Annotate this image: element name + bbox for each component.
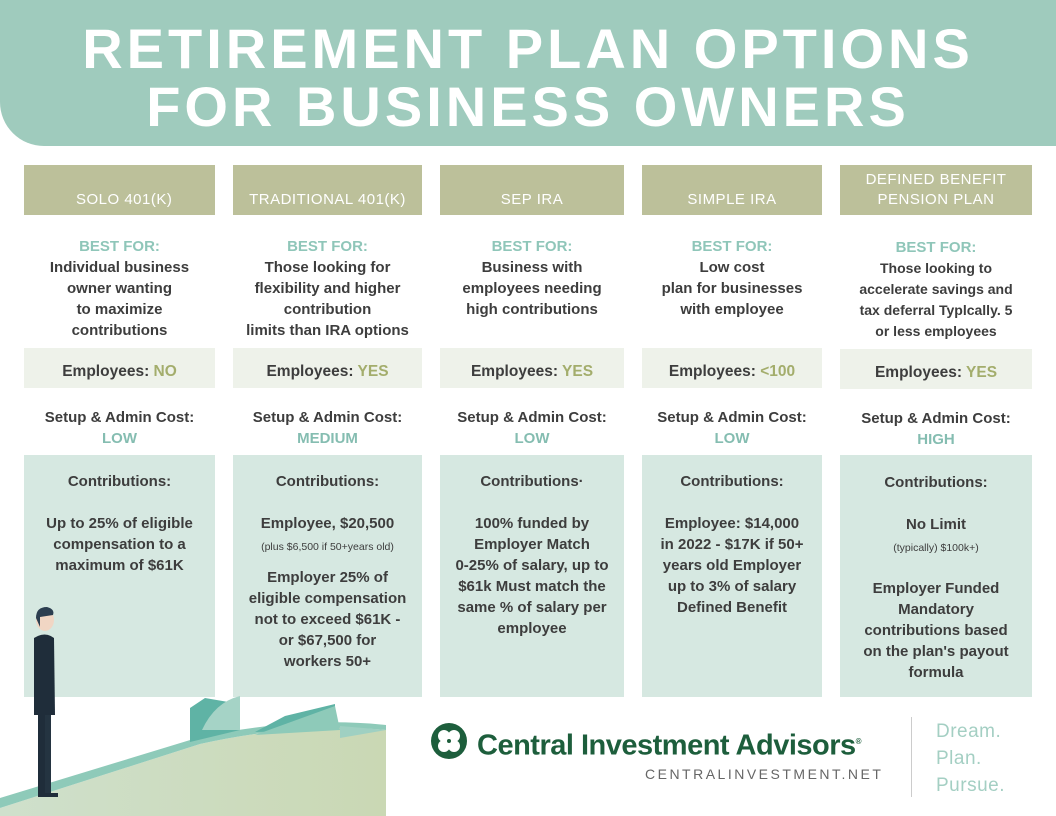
website: CENTRALINVESTMENT.NET bbox=[645, 766, 883, 782]
panel: SIMPLE IRA bbox=[642, 165, 822, 697]
panel: defined benefit: Employer Funded bbox=[873, 580, 999, 597]
best for text: Low cost bbox=[699, 259, 764, 276]
column heading bbox=[24, 165, 215, 215]
employees row: Employees: NO bbox=[62, 363, 177, 380]
setup cost bbox=[45, 409, 194, 447]
employees row bbox=[440, 348, 624, 388]
employees row bbox=[642, 348, 822, 388]
panel: traditional 401k: or $67,500 for bbox=[279, 632, 376, 649]
column heading: SIMPLE IRA bbox=[687, 191, 777, 208]
setup cost: LOW bbox=[514, 430, 550, 447]
contributions text: Contributions: bbox=[68, 473, 171, 490]
panel: solo 401k: compensation to a bbox=[53, 536, 186, 553]
employees row: Employees: YES bbox=[471, 363, 593, 380]
best for text: BEST FOR: bbox=[692, 238, 772, 255]
panel: solo 401k bbox=[24, 165, 215, 697]
header band bbox=[0, 0, 1056, 146]
panel: SIMPLE IRA: Defined Benefit bbox=[677, 599, 787, 616]
best for text: owner wanting bbox=[67, 280, 172, 297]
panel: defined benefit: contributions based bbox=[864, 622, 1008, 639]
title: RETIREMENT PLAN OPTIONS bbox=[82, 17, 974, 80]
panel: traditional 401k: workers 50+ bbox=[284, 653, 371, 670]
employees row: Employees: <100 bbox=[669, 363, 795, 380]
best for text: Business with bbox=[482, 259, 582, 276]
column heading: SEP IRA bbox=[501, 191, 563, 208]
setup cost: Setup & Admin Cost: bbox=[457, 409, 607, 426]
panel: traditional 401k: not to exceed $61K - bbox=[255, 611, 400, 628]
best for text: Those looking to bbox=[880, 260, 992, 276]
panel: defined benefit: on the plan's payout bbox=[863, 643, 1009, 660]
title: FOR BUSINESS OWNERS bbox=[146, 75, 910, 138]
logo: clover icon bbox=[431, 723, 467, 759]
employees row: Employees: YES bbox=[875, 364, 997, 381]
man bbox=[34, 607, 58, 797]
tagline bbox=[936, 721, 1005, 796]
tagline: Pursue. bbox=[936, 775, 1005, 796]
panel: SEP IRA: 100% funded by bbox=[475, 515, 589, 532]
setup cost: LOW bbox=[714, 430, 750, 447]
best for text: with employee bbox=[680, 301, 784, 318]
best for text: plan for businesses bbox=[662, 280, 802, 297]
best for text: BEST FOR: bbox=[79, 238, 160, 255]
panel: SIMPLE IRA: up to 3% of salary bbox=[668, 578, 796, 595]
panel: defined benefit: Mandatory bbox=[898, 601, 974, 618]
best for text: contribution bbox=[284, 301, 371, 318]
best for text: accelerate savings and bbox=[859, 281, 1013, 297]
best for text bbox=[859, 239, 1013, 339]
title bbox=[82, 17, 974, 138]
column heading bbox=[440, 165, 624, 215]
setup cost: Setup & Admin Cost: bbox=[657, 409, 807, 426]
panel: SEP IRA: same % of salary per bbox=[457, 599, 607, 616]
contributions text: Contributions· bbox=[480, 473, 584, 490]
panel: SIMPLE IRA: in 2022 - $17K if 50+ bbox=[660, 536, 804, 553]
contributions box bbox=[24, 455, 215, 697]
illustration: man on rising hill with arrows bbox=[0, 607, 386, 816]
best for text bbox=[50, 238, 189, 339]
column heading bbox=[233, 165, 422, 215]
panel: traditional 401k: Employer 25% of bbox=[267, 569, 388, 586]
column heading: DEFINED BENEFIT bbox=[866, 171, 1006, 188]
setup cost: LOW bbox=[102, 430, 137, 447]
setup cost: MEDIUM bbox=[297, 430, 358, 447]
panel: solo 401k: maximum of $61K bbox=[55, 557, 184, 574]
best for text: employees needing bbox=[462, 280, 602, 297]
contributions box bbox=[642, 455, 822, 697]
setup cost: HIGH bbox=[917, 431, 955, 448]
tagline: Plan. bbox=[936, 748, 982, 769]
panel: defined benefit: No Limit bbox=[906, 516, 966, 533]
panel: SEP IRA bbox=[440, 165, 624, 697]
best for text bbox=[662, 238, 802, 318]
employees row bbox=[840, 349, 1032, 389]
contributions box bbox=[440, 455, 624, 697]
best for text bbox=[462, 238, 602, 318]
best for text: tax deferral Typlcally. 5 bbox=[860, 302, 1012, 318]
logo text: Central Investment Advisors® bbox=[477, 730, 861, 762]
setup cost bbox=[657, 409, 807, 447]
best for text: BEST FOR: bbox=[492, 238, 572, 255]
setup cost: Setup & Admin Cost: bbox=[253, 409, 402, 426]
panel: traditional 401k: Employee, $20,500 bbox=[261, 515, 394, 532]
panel: traditional 401k bbox=[233, 165, 422, 697]
setup cost bbox=[253, 409, 402, 447]
best for text bbox=[246, 238, 409, 339]
contributions text: Contributions: bbox=[680, 473, 784, 490]
panel: SEP IRA: Employer Match bbox=[474, 536, 590, 553]
setup cost bbox=[457, 409, 607, 447]
best for text: high contributions bbox=[466, 301, 598, 318]
column heading: PENSION PLAN bbox=[878, 191, 994, 208]
employees row bbox=[233, 348, 422, 388]
contributions text: Contributions: bbox=[276, 473, 379, 490]
best for text: to maximize bbox=[77, 301, 162, 318]
panel: defined benefit: formula bbox=[908, 664, 964, 681]
panel: SIMPLE IRA: Employee: $14,000 bbox=[665, 515, 799, 532]
column heading: TRADITIONAL 401(K) bbox=[249, 191, 406, 208]
column heading bbox=[642, 165, 822, 215]
best for text: or less employees bbox=[875, 323, 997, 339]
best for text: flexibility and higher bbox=[255, 280, 400, 297]
panel: SEP IRA: employee bbox=[497, 620, 567, 637]
tagline: Dream. bbox=[936, 721, 1001, 742]
panel: traditional 401k: (plus $6,500 if 50+years old) bbox=[261, 541, 394, 553]
panel: defined benefit bbox=[840, 165, 1032, 697]
panel: defined benefit: (typically) $100k+) bbox=[893, 542, 979, 554]
best for text: BEST FOR: bbox=[287, 238, 368, 255]
setup cost: Setup & Admin Cost: bbox=[45, 409, 194, 426]
best for text: limits than IRA options bbox=[246, 322, 409, 339]
panel: SEP IRA: $61k Must match the bbox=[458, 578, 606, 595]
arrow 1 bbox=[190, 698, 240, 742]
contributions box bbox=[233, 455, 422, 697]
setup cost: Setup & Admin Cost: bbox=[861, 410, 1011, 427]
best for text: Individual business bbox=[50, 259, 189, 276]
panel: traditional 401k: eligible compensation bbox=[249, 590, 406, 607]
column heading: SOLO 401(K) bbox=[76, 191, 172, 208]
panel: SEP IRA: 0-25% of salary, up to bbox=[455, 557, 609, 574]
contributions box bbox=[840, 455, 1032, 697]
panel: SIMPLE IRA: years old Employer bbox=[663, 557, 801, 574]
best for text: BEST FOR: bbox=[896, 239, 976, 256]
arrow 2 bbox=[255, 704, 335, 732]
employees row bbox=[24, 348, 215, 388]
setup cost bbox=[861, 410, 1011, 448]
panel: solo 401k: Up to 25% of eligible bbox=[46, 515, 193, 532]
contributions text: Contributions: bbox=[884, 474, 988, 491]
best for text: Those looking for bbox=[265, 259, 390, 276]
divider bbox=[911, 717, 912, 797]
column heading bbox=[840, 165, 1032, 215]
employees row: Employees: YES bbox=[266, 363, 389, 380]
best for text: contributions bbox=[72, 322, 167, 339]
